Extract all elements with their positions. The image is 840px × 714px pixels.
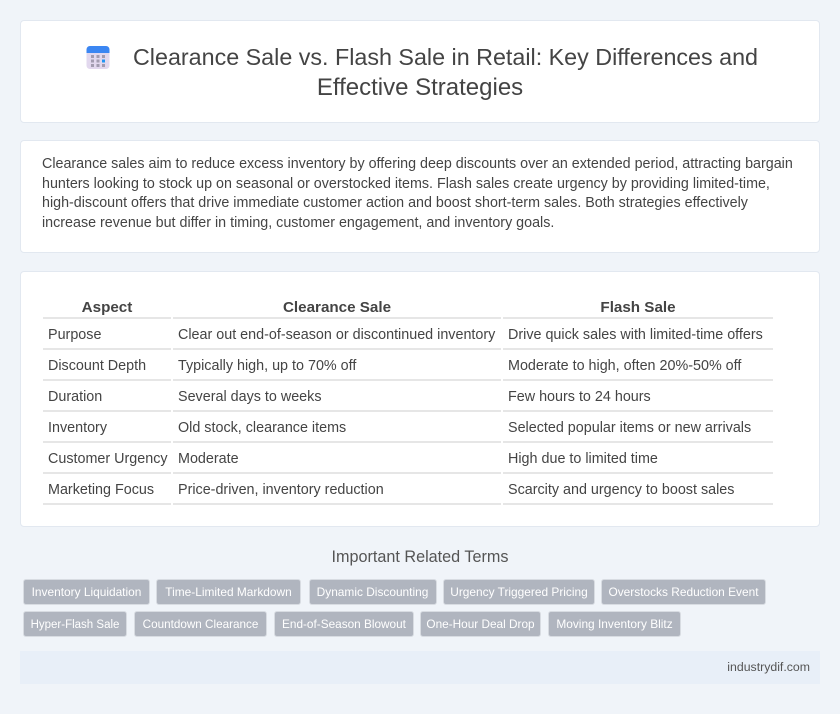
description text [42,156,793,231]
table rows: Discount Depth [48,358,146,374]
related term tags: Countdown Clearance [143,618,258,631]
footer source: industrydif.com [727,660,810,674]
heading: related terms: Important Related Terms [332,548,508,566]
description text: hunters looking to stock up on seasonal or overstocked items. Flash sales create urgency by providing limited-time, [42,176,770,192]
icon: calendar [86,46,110,69]
related term tags: End-of-Season Blowout [282,617,406,631]
description text: increase revenue but differ in timing, customer engagement, and inventory goals. [42,215,554,231]
table rows: Duration [48,389,102,405]
title: Clearance Sale vs. Flash Sale in Retail: Key Differences and [133,44,758,70]
related term tags: Moving Inventory Blitz [556,617,673,631]
panel: description [20,140,820,253]
table rows: Drive quick sales with limited-time offers [508,327,763,343]
table header [82,299,676,316]
table rows: Several days to weeks [178,389,322,405]
description text: Clearance sales aim to reduce excess inventory by offering deep discounts over an extended period, attracting bargain [42,156,793,172]
table rows: Customer Urgency [48,451,168,467]
table rows: Selected popular items or new arrivals [508,420,751,436]
related term tags: Dynamic Discounting [317,585,428,599]
table rows: Price-driven, inventory reduction [178,482,384,498]
table header: Clearance Sale [283,299,391,316]
table rows: Typically high, up to 70% off [178,358,356,374]
related term tags: Hyper-Flash Sale [31,619,119,631]
table rows: Few hours to 24 hours [508,389,651,405]
table rows: Scarcity and urgency to boost sales [508,482,734,498]
related term tags: One-Hour Deal Drop [426,617,535,631]
table rows [43,317,773,505]
title: Effective Strategies [317,74,523,100]
table rows: Old stock, clearance items [178,420,346,436]
table rows: Purpose [48,327,101,343]
related term tags [23,579,766,637]
related term tags: Urgency Triggered Pricing [450,585,588,599]
table rows: Inventory [48,420,107,436]
table rows: Clear out end-of-season or discontinued inventory [178,327,495,343]
related term tags: Overstocks Reduction Event [608,585,759,599]
table rows: Marketing Focus [48,482,154,498]
description text: high-discount offers that drive immediate customer action and boost short-term sales. Both strategies effectively [42,195,748,211]
table rows: High due to limited time [508,451,658,467]
table header: Flash Sale [600,299,676,316]
panel: header [20,20,820,123]
footer [20,651,820,684]
table header: Aspect [82,299,132,316]
title [133,44,758,100]
table rows: Moderate [178,451,239,467]
related term tags: Time-Limited Markdown [165,585,292,599]
panel: comparison table [20,271,820,527]
related term tags: Inventory Liquidation [32,585,141,599]
table rows: Moderate to high, often 20%-50% off [508,358,741,374]
